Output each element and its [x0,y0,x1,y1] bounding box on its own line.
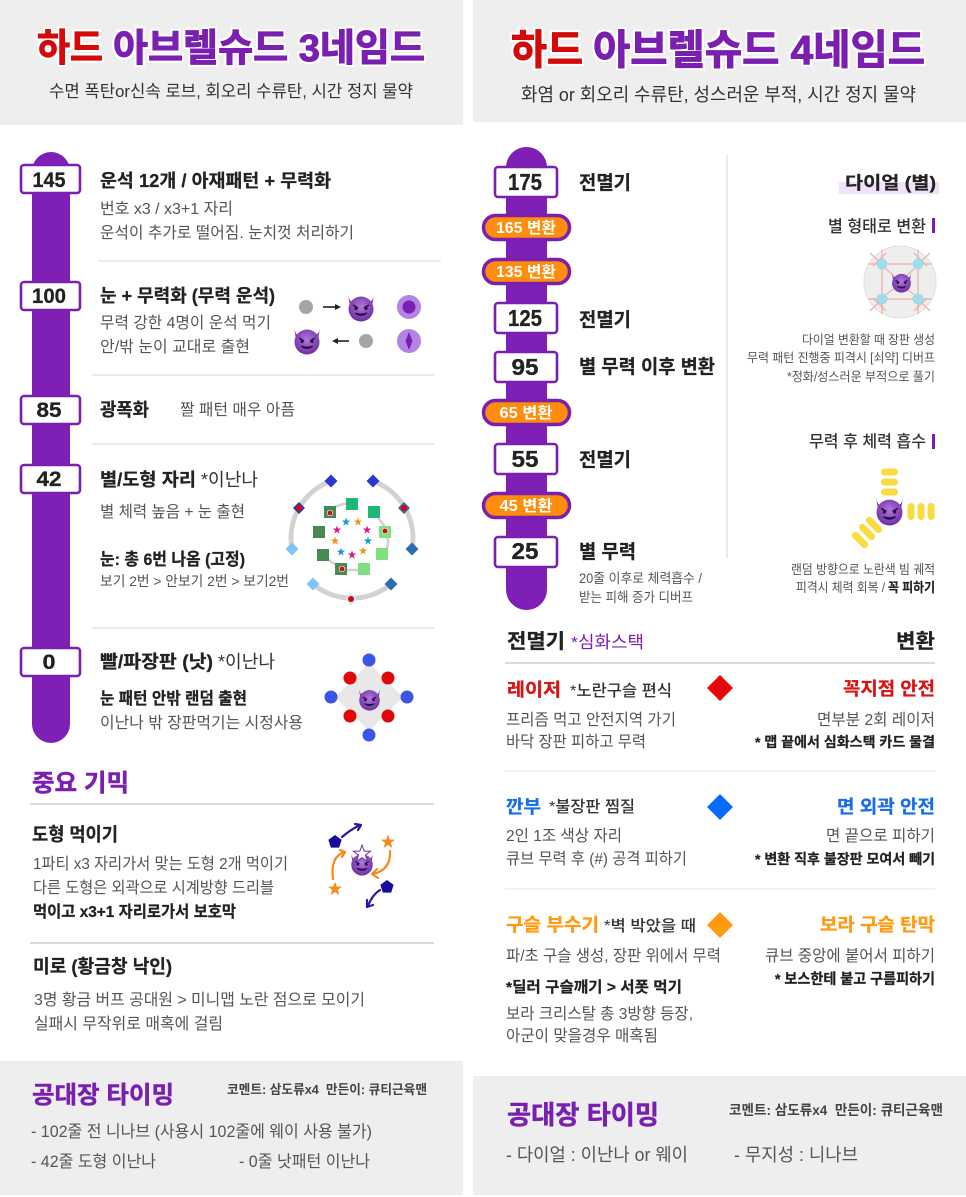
row: orb breaking: 큐브 중앙에 붙어서 피하기 [765,947,935,965]
icon: orange diamond [707,912,733,938]
row: laser: 레이저 [507,680,561,700]
label: wipe 175: 전멸기 [579,172,631,194]
diagram: floor pattern [864,246,936,318]
text block: shape eating [32,824,288,921]
text block: 85 enrage [100,400,295,420]
title: 3 gate: 아브렐슈드 3네임드 [113,28,425,70]
text block: shape eating: 먹이고 x3+1 자리로가서 보호막 [33,903,236,921]
text block: dial transform notes: 무력 패턴 진행중 피격시 [쇠약] 디버프 [747,350,935,365]
row: orb breaking [506,912,935,1045]
text block: beam notes: 피격시 체력 회복 / [796,580,885,595]
table heading: wipe and transform: 전멸기 [507,630,565,653]
text block: 145 meteor pattern: 운석 12개 / 아재패턴 + 무력화 [100,171,331,191]
text block: 85 enrage: 짤 패턴 매우 아픔 [180,401,295,419]
row: orb breaking: 파/초 구슬 생성, 장판 위에서 무력 [506,947,721,965]
hp marker 125: 125 [508,305,542,331]
transition pill 45: 45 변환 [500,497,552,515]
timing list: - 무지성 : 니나브 [734,1145,858,1165]
text block: dial transform notes: 다이얼 변환할 때 장판 생성 [802,333,935,347]
text block: dial transform notes: *정화/성스러운 부적으로 풀기 [787,370,935,384]
text block: 0 red blue field: 이난나 밖 장판먹기는 시정사용 [100,714,303,732]
timeline bar: 3 gate [32,152,70,743]
text block: 0 red blue field: 눈 패턴 안밖 랜덤 출현 [100,689,247,708]
hp marker 0: 0 [42,651,56,674]
text block: 100 eye and stagger: 무력 강한 4명이 운석 먹기 [100,314,271,332]
transition pill 165 [484,216,570,240]
text block: 42 star and shape [100,470,289,589]
timing list [506,1145,858,1165]
row: laser: 프리즘 먹고 안전지역 가기 [506,711,676,729]
text block: star stagger: 받는 피해 증가 디버프 [579,590,693,605]
hp marker 100 [21,282,80,310]
icon: eye direction diagram [294,295,421,354]
hp marker 25: 25 [512,538,539,564]
text block: 0 red blue field [100,652,303,732]
panel: 4 gate right column [473,0,966,1195]
panel: raid leader timing 3 gate [0,1061,463,1195]
text block: shape eating: 도형 먹이기 [32,824,118,845]
heading: key mechanics: 중요 기믹 [32,770,129,797]
row: kkanbu: 큐브 무력 후 (#) 공격 피하기 [506,850,687,868]
text block: 42 star and shape: 별/도형 자리 [100,470,196,490]
hp marker 125 [495,303,557,333]
text block: shape eating: 1파티 x3 자리가서 맞는 도형 2개 먹이기 [33,855,288,873]
hp marker 42: 42 [36,468,62,491]
credit line: 코멘트: 삼도류x4 만든이: 큐티근육맨 [227,1082,427,1097]
text block: 0 red blue field: *이난나 [218,652,275,672]
hp marker 100: 100 [32,285,66,308]
row: laser: * 맵 끝에서 심화스택 카드 물결 [755,734,935,750]
hp marker 145 [21,165,80,193]
subtitle: 4 gate: 화염 or 회오리 수류탄, 성스러운 부적, 시간 정지 물약 [521,84,916,105]
row: orb breaking: 아군이 맞을경우 매혹됨 [506,1027,658,1045]
text block: beam notes: 꼭 피하기 [888,580,935,595]
panel: raid leader timing 4 gate [473,1076,966,1195]
hp marker 85 [21,396,80,424]
row: laser: 면부분 2회 레이저 [817,711,935,729]
text block: star stagger: 별 무력 [579,541,636,563]
title: 4 gate: 아브렐슈드 4네임드 [593,27,925,73]
hp marker 95 [495,352,557,382]
row: orb breaking: *벽 박았을 때 [604,917,696,935]
hp marker 145: 145 [32,169,66,192]
text block: star stagger: 20줄 이후로 체력흡수 / [579,571,702,586]
subheading: health absorb: 무력 후 체력 흡수 [809,432,926,451]
transition pill 45 [484,494,570,518]
transition pill 135 [484,260,570,284]
row: orb breaking: * 보스한테 붙고 구름피하기 [775,971,935,988]
header background: 3 gate [0,0,463,125]
diagram: red and blue orbs [324,654,414,742]
transition pill 65 [484,400,570,424]
table heading: wipe and transform [507,630,935,653]
row: laser: 바닥 장판 피하고 무력 [506,733,646,751]
table heading: wipe and transform: 변환 [896,630,935,653]
row: orb breaking: *딜러 구슬깨기 > 서폿 먹기 [506,979,682,996]
icon: blue diamond [707,794,733,820]
text block: 145 meteor pattern: 운석이 추가로 떨어짐. 눈치껏 처리하기 [100,224,354,242]
label: after star stagger: 별 무력 이후 변환 [579,356,715,378]
text block: 85 enrage: 광폭화 [100,400,149,420]
row: laser [506,675,935,751]
subtitle: 3 gate: 수면 폭탄or신속 로브, 회오리 수류탄, 시간 정지 물약 [49,82,413,101]
text block: maze: 미로 (황금창 낙인) [33,956,172,977]
hp marker 42 [21,465,80,493]
hp marker 0 [21,648,80,676]
row: kkanbu: 면 끝으로 피하기 [826,827,935,845]
subheading: transform to star: 별 형태로 변환 [828,217,926,236]
text block: 42 star and shape: 보기 2번 > 안보기 2번 > 보기2번 [100,573,289,589]
row: orb breaking: 보라 크리스탈 총 3방향 등장, [506,1005,693,1023]
credit line: 코멘트: 삼도류x4 만든이: 큐티근육맨 [729,1102,943,1118]
text block: 42 star and shape: 눈: 총 6번 나옴 (고정) [100,550,245,569]
heading: raid leader timing: 공대장 타이밍 [507,1100,659,1130]
text block: 100 eye and stagger [100,286,275,356]
row: orb breaking: 보라 구슬 탄막 [820,915,935,935]
transition pill 165: 165 변환 [496,219,556,237]
text block: 100 eye and stagger: 안/밖 눈이 교대로 출현 [100,338,250,356]
label: wipe 55: 전멸기 [579,449,631,471]
header background: 4 gate [473,0,966,122]
heading: dial star: 다이얼 (별) [845,173,936,193]
timing list: - 102줄 전 니나브 (사용시 102줄에 웨이 사용 불가) [31,1122,372,1141]
hp marker 85: 85 [36,399,62,422]
timing list: - 42줄 도형 이난나 [31,1152,156,1171]
diagram: shape dribble [328,824,395,907]
text block: 0 red blue field: 빨/파장판 (낫) [100,652,213,672]
hp marker 55 [495,444,557,474]
row: laser: *노란구슬 편식 [570,682,672,700]
text block: maze: 실패시 무작위로 매혹에 걸림 [34,1015,223,1033]
title: 3 gate: 하드 [37,28,103,70]
panel: 3 gate left column [0,0,463,1195]
text block: dial transform notes [747,333,935,384]
text block: beam notes: 랜덤 방향으로 노란색 빔 궤적 [791,562,935,577]
text block: 42 star and shape: 별 체력 높음 + 눈 출현 [100,503,245,521]
text block: 145 meteor pattern [100,171,354,242]
title: 4 gate: 하드 [511,27,583,73]
transition pill 135: 135 변환 [496,263,556,281]
row: kkanbu: * 변환 직후 불장판 모여서 빼기 [755,851,935,867]
hp marker 55: 55 [512,446,539,472]
hp marker 25 [495,537,557,567]
row: kkanbu: *불장판 찜질 [549,798,635,816]
hp marker 175: 175 [508,169,542,195]
hp marker 95: 95 [512,354,539,380]
row: kkanbu: 면 외곽 안전 [837,797,935,817]
timeline bar: 4 gate [506,147,547,610]
text block: beam notes [791,562,935,595]
row: orb breaking: 구슬 부수기 [506,915,599,935]
text block: 42 star and shape: *이난나 [201,470,258,490]
table heading: wipe and transform: *심화스택 [571,633,644,652]
hp marker 175 [495,167,557,197]
diagram: yellow beams [850,468,934,550]
text block: star stagger [579,541,702,605]
text block: maze [33,956,365,1033]
timing list [31,1122,372,1171]
row: kkanbu: 깐부 [506,797,541,817]
text block: shape eating: 다른 도형은 외곽으로 시계방향 드리블 [33,879,274,897]
heading: raid leader timing: 공대장 타이밍 [32,1082,174,1109]
icon: red diamond [707,675,733,701]
diagram: star and shape arena [286,474,418,605]
row: laser: 꼭지점 안전 [843,679,935,699]
timing list: - 0줄 낫패턴 이난나 [239,1152,370,1171]
text block: 100 eye and stagger: 눈 + 무력화 (무력 운석) [100,286,275,306]
transition pill 65: 65 변환 [500,404,552,422]
row: kkanbu: 2인 1조 색상 자리 [506,827,622,845]
row: kkanbu [506,794,935,868]
timing list: - 다이얼 : 이난나 or 웨이 [506,1145,688,1165]
label: wipe 125: 전멸기 [579,309,631,331]
text block: maze: 3명 황금 버프 공대원 > 미니맵 노란 점으로 모이기 [34,991,365,1009]
text block: 145 meteor pattern: 번호 x3 / x3+1 자리 [100,200,233,218]
